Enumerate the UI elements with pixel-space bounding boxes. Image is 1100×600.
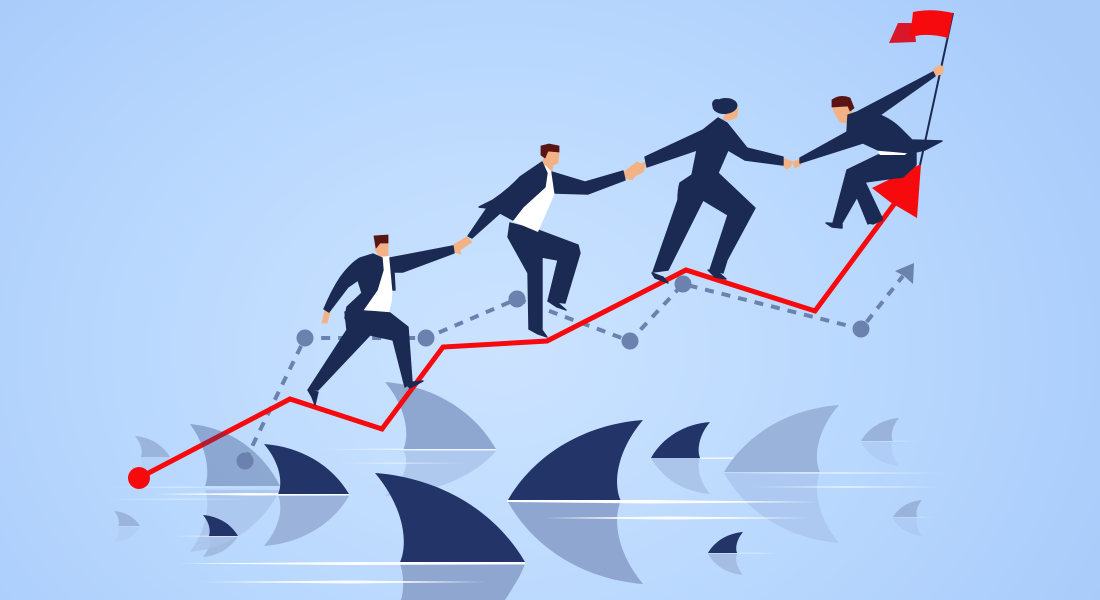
translucent fin over the line [190, 424, 280, 486]
person 3: woman in suit [630, 97, 793, 283]
flag on pole [889, 10, 953, 165]
dashed grey chart line with arrow [245, 263, 914, 461]
fin reflections in the water [114, 442, 922, 600]
person 2: man in suit [468, 144, 645, 337]
person 1: man in suit [308, 235, 472, 405]
white water streaks [100, 440, 950, 584]
red rising chart line with arrow [128, 164, 921, 489]
person 4: man sitting on the arrow holding the flag [793, 65, 944, 228]
faded background fins [114, 382, 922, 526]
dashed line start point [236, 452, 254, 470]
navy foreground fins [203, 420, 743, 562]
